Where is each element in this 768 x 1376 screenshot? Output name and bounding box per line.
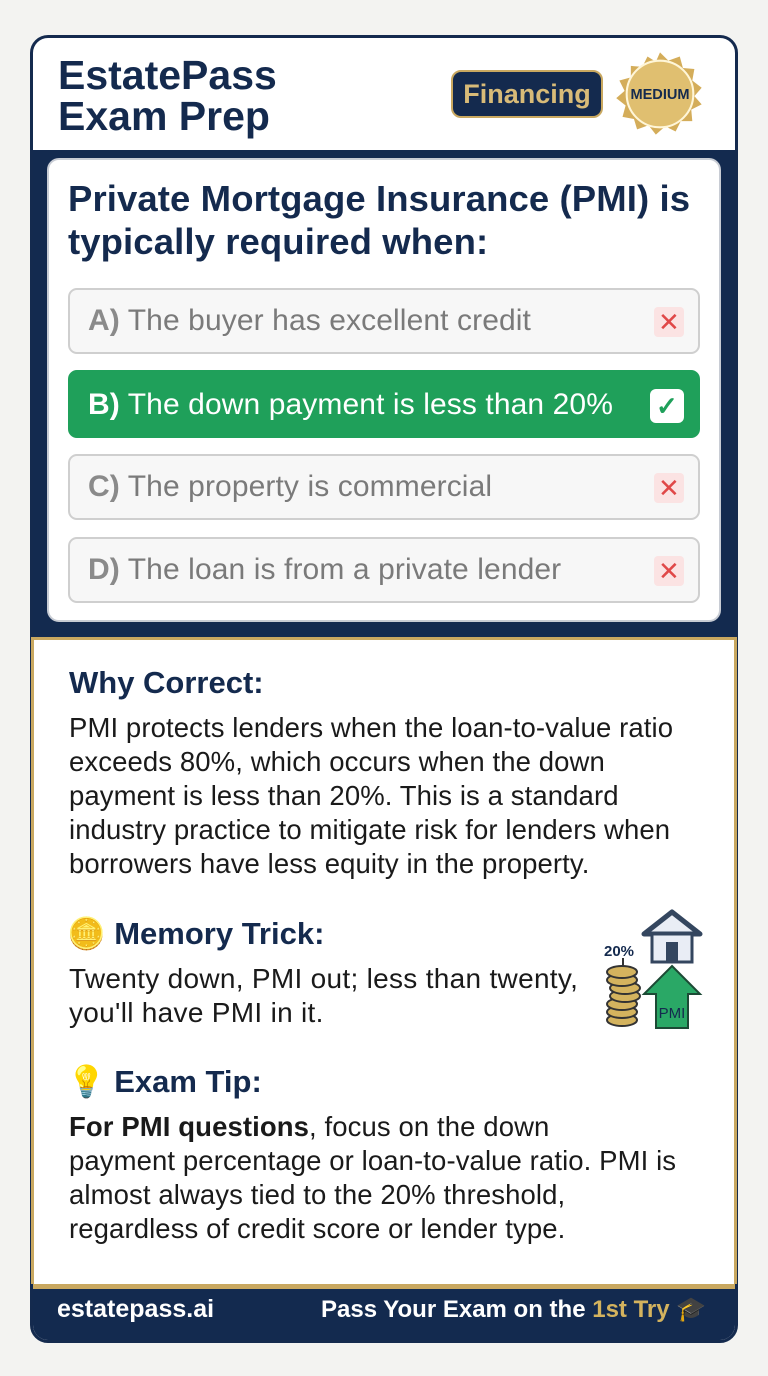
why correct text: exceeds 80%, which occurs when the down bbox=[69, 746, 605, 777]
exam tip text: payment percentage or loan-to-value ratio. PMI is bbox=[69, 1145, 676, 1176]
icon: coins house pmi: 20% bbox=[604, 943, 634, 960]
exam tip heading: 💡 Exam Tip: bbox=[67, 1064, 262, 1099]
option D bbox=[68, 537, 700, 603]
brand title: Exam Prep bbox=[58, 93, 270, 139]
brand title bbox=[58, 52, 277, 139]
why correct text: payment is less than 20%. This is a standard bbox=[69, 780, 619, 811]
option A: A) The buyer has excellent credit bbox=[88, 304, 531, 337]
question text bbox=[68, 178, 690, 262]
why correct text: borrowers have less equity in the property. bbox=[69, 848, 589, 879]
option C: C) The property is commercial bbox=[88, 470, 492, 503]
option C bbox=[68, 454, 700, 520]
option A bbox=[68, 288, 700, 354]
footer url: estatepass.ai bbox=[57, 1295, 214, 1323]
footer band bbox=[33, 1284, 735, 1346]
option D: ✕ bbox=[658, 556, 680, 586]
memory trick text: Twenty down, PMI out; less than twenty, bbox=[69, 963, 578, 994]
icon: coins house pmi: PMI bbox=[659, 1005, 685, 1022]
why correct text bbox=[69, 712, 673, 879]
option D: D) The loan is from a private lender bbox=[88, 553, 561, 586]
navy band bbox=[33, 150, 735, 640]
option B correct: B) The down payment is less than 20% bbox=[88, 388, 613, 421]
memory trick text bbox=[69, 963, 578, 1028]
footer tagline: Pass Your Exam on the 1st Try 🎓 bbox=[321, 1296, 706, 1323]
badge: Financing bbox=[451, 70, 603, 118]
question card bbox=[47, 158, 721, 622]
why correct text: industry practice to mitigate risk for lenders when bbox=[69, 814, 670, 845]
memory trick text: you'll have PMI in it. bbox=[69, 997, 324, 1028]
memory trick heading: 🪙 Memory Trick: bbox=[67, 916, 324, 951]
badge: medium seal bbox=[616, 52, 702, 135]
question text: Private Mortgage Insurance (PMI) is bbox=[68, 178, 690, 219]
option B correct bbox=[68, 370, 700, 438]
why correct text: PMI protects lenders when the loan-to-value ratio bbox=[69, 712, 673, 743]
why correct heading: Why Correct: bbox=[69, 665, 264, 700]
exam tip text: For PMI questions, focus on the down bbox=[69, 1111, 549, 1142]
option C: ✕ bbox=[658, 473, 680, 503]
badge: medium seal: MEDIUM bbox=[630, 87, 690, 103]
question text: typically required when: bbox=[68, 221, 488, 262]
icon: coins house pmi bbox=[604, 909, 702, 1029]
lower section gold border bbox=[31, 637, 737, 1284]
option A: ✕ bbox=[658, 307, 680, 337]
exam tip text bbox=[69, 1111, 676, 1244]
brand title: EstatePass bbox=[58, 52, 277, 98]
badge: Financing: Financing bbox=[463, 79, 591, 109]
exam tip text: regardless of credit score or lender type. bbox=[69, 1213, 565, 1244]
option B correct: ✓ bbox=[656, 391, 678, 421]
exam tip text: almost always tied to the 20% threshold, bbox=[69, 1179, 565, 1210]
